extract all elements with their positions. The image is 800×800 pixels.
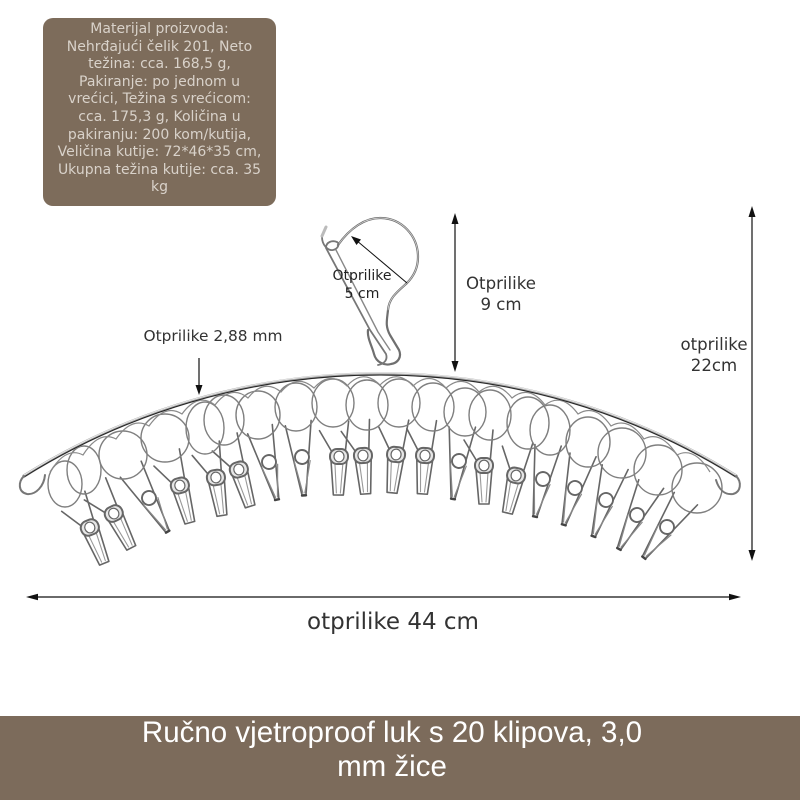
hanger bar — [20, 373, 740, 494]
panel: product specifications: Nehrđajući čelik 201, Neto — [67, 39, 252, 55]
label: total height: 22cm — [691, 356, 737, 375]
icon: hanger hook — [322, 218, 418, 365]
arrow: 22 cm height — [748, 206, 756, 561]
label: hook height: 9 cm — [480, 295, 522, 314]
panel: product specifications: Ukupna težina kutije: cca. 35 — [58, 162, 261, 178]
panel: product specifications: Pakiranje: po jednom u — [79, 74, 240, 90]
panel: product specifications: težina: cca. 168,5 g, — [88, 56, 231, 72]
label: total height — [680, 335, 748, 375]
panel: product specifications: Materijal proizvoda: — [90, 21, 229, 37]
panel: product specifications — [43, 18, 276, 206]
arrow: hook width — [351, 236, 407, 283]
label: total height: otprilike — [680, 335, 748, 354]
label: total width: otprilike 44 cm — [307, 609, 479, 635]
panel: product specifications: kg — [151, 179, 168, 195]
label: hook width — [332, 268, 392, 302]
rings and clips — [48, 377, 722, 571]
label: hook height — [466, 274, 536, 314]
title band — [0, 716, 800, 800]
title band: Ručno vjetroproof luk s 20 klipova, 3,0 — [142, 716, 642, 749]
label: hook width: 5 cm — [345, 286, 379, 302]
panel: product specifications: cca. 175,3 g, Količina u — [78, 109, 241, 125]
panel: product specifications: Veličina kutije: 72*46*35 cm, — [58, 144, 261, 160]
arrow: 44 cm width — [26, 594, 741, 600]
arrow: 9 cm height — [452, 213, 458, 372]
rings — [48, 379, 722, 513]
label: wire thickness: Otprilike 2,88 mm — [144, 327, 282, 345]
label: hook height: Otprilike — [466, 274, 536, 293]
arrow: wire thickness — [196, 358, 202, 395]
scalloped wire under bar — [50, 377, 710, 472]
label: hook width: Otprilike — [332, 268, 392, 284]
title band: mm žice — [337, 750, 447, 783]
clips — [58, 491, 113, 571]
panel: product specifications: vrećici, Težina s vrećicom: — [68, 91, 251, 107]
panel: product specifications: pakiranju: 200 kom/kutija, — [68, 127, 251, 143]
